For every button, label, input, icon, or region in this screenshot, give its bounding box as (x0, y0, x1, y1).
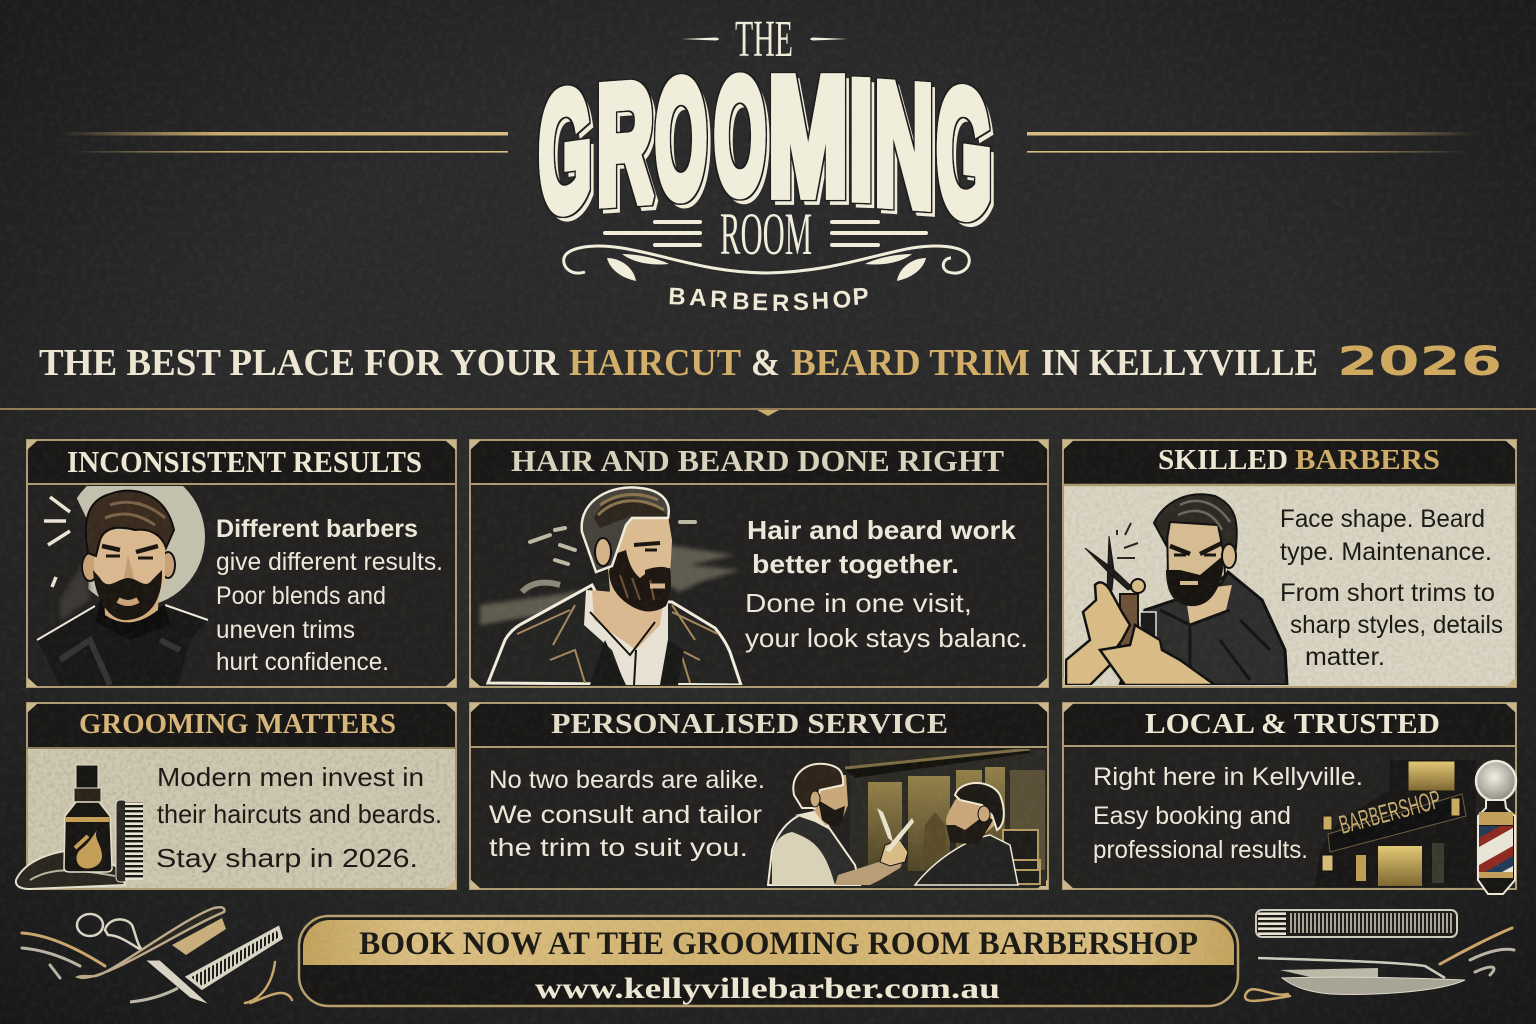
logo word: THE: THE (735, 11, 793, 68)
body text: sharp styles, details (1290, 611, 1503, 639)
body text (216, 515, 443, 676)
headline: HAIRCUT (569, 342, 741, 384)
decorative lines beside logo (60, 132, 1477, 153)
heading: INCONSISTENT RESULTS (67, 444, 422, 479)
illustration: barber pole (1474, 760, 1518, 895)
panel frame (1063, 703, 1516, 889)
body text: We consult and tailor (489, 801, 762, 829)
heading: LOCAL & TRUSTED (1145, 709, 1440, 740)
illustration: bearded man in jacket (480, 487, 741, 685)
logo word: GROOMING: G (539, 55, 591, 249)
logo ornament (564, 222, 969, 281)
headline (39, 339, 1502, 385)
body text (489, 766, 765, 862)
headline: THE BEST PLACE FOR YOUR (39, 342, 560, 384)
icon: razor (130, 960, 210, 1005)
body text: Easy booking and (1093, 802, 1291, 830)
panel frame (27, 440, 456, 687)
icon: straight razor (1258, 958, 1465, 994)
panel: local and trusted (1063, 703, 1520, 894)
body text: Different barbers (216, 515, 418, 543)
panel: inconsistent results (27, 440, 456, 687)
flourishes (22, 933, 292, 1003)
icon group: barber tools left (22, 907, 292, 1005)
logo word: THE (681, 11, 848, 68)
heading: SKILLED (1158, 445, 1288, 476)
illustration: beard oil and comb (16, 765, 143, 889)
heading: GROOMING MATTERS (79, 709, 396, 740)
logo word: GROOMING: R (596, 48, 654, 239)
headline: IN KELLYVILLE (1041, 342, 1318, 384)
panel: grooming matters (16, 703, 456, 889)
logo word: GROOMING: I (849, 47, 873, 234)
body text: their haircuts and beards. (157, 799, 442, 829)
panel frame (1063, 440, 1516, 687)
body text: give different results. (216, 548, 443, 576)
panel frame (470, 440, 1048, 687)
body text: Hair and beard work (747, 515, 1017, 545)
headline divider (0, 408, 1536, 416)
heading: PERSONALISED SERVICE (551, 709, 948, 740)
body text: Right here in Kellyville. (1093, 763, 1363, 791)
panel: hair and beard done right (470, 440, 1048, 687)
icon group: barber tools right (1245, 910, 1514, 1001)
body text: better together. (752, 549, 959, 579)
body text: hurt confidence. (216, 648, 389, 676)
body text: the trim to suit you. (489, 834, 748, 862)
heading: HAIR AND BEARD DONE RIGHT (511, 443, 1004, 478)
logo word: BARBERSHOP: BARBERSHOP (668, 283, 869, 317)
illustration: barber with scissors (1066, 494, 1287, 685)
website url: www.kellyvillebarber.com.au (535, 972, 1000, 1005)
illustration: frustrated man (36, 486, 208, 685)
banner heading: BOOK NOW AT THE GROOMING ROOM BARBERSHOP (359, 926, 1198, 962)
body text (156, 762, 442, 873)
body text: your look stays balanc. (745, 623, 1028, 653)
panel frame (470, 703, 1048, 889)
body text (1280, 505, 1503, 671)
illustration: barber consulting client (768, 749, 1046, 886)
logo word: GROOMING: G (936, 50, 992, 256)
icon: straight comb (1256, 910, 1457, 937)
flourishes (1245, 928, 1514, 1001)
body text: Modern men invest in (157, 762, 424, 792)
panel: personalised service (470, 703, 1048, 889)
body text: uneven trims (216, 616, 355, 644)
logo word: GROOMING: N (874, 49, 934, 243)
icon: scissors (77, 914, 143, 951)
body text: type. Maintenance. (1280, 538, 1492, 566)
headline: BEARD TRIM (791, 342, 1030, 384)
body text: Face shape. Beard (1280, 505, 1485, 533)
heading (1158, 445, 1440, 476)
banner shape (299, 916, 1238, 1006)
body text: Stay sharp in 2026. (156, 843, 418, 873)
shop sign text: BARBERSHOP (1336, 784, 1444, 840)
logo (539, 11, 992, 317)
body text: matter. (1305, 643, 1385, 671)
body text: Poor blends and (216, 582, 386, 610)
logo word: GROOMING: M (768, 43, 848, 230)
headline: 2026 (1337, 339, 1502, 385)
call to action banner (299, 916, 1238, 1006)
illustration: barbershop storefront (1315, 760, 1476, 887)
logo word: GROOMING: O (655, 44, 707, 232)
logo word: GROOMING (539, 43, 992, 256)
icon: brush (78, 907, 226, 978)
body text (745, 515, 1028, 653)
heading: BARBERS (1295, 445, 1440, 476)
headline: & (751, 342, 780, 384)
body text: Done in one visit, (745, 588, 972, 618)
panel: skilled barbers (1063, 440, 1516, 687)
body text: No two beards are alike. (489, 766, 765, 794)
body text: From short trims to (1280, 579, 1495, 607)
icon: comb (188, 928, 281, 988)
logo word: ROOM: ROOM (720, 201, 812, 267)
panel frame (27, 703, 456, 889)
body text: professional results. (1093, 836, 1308, 864)
body text (1093, 763, 1363, 864)
logo word: GROOMING: O (714, 46, 766, 227)
